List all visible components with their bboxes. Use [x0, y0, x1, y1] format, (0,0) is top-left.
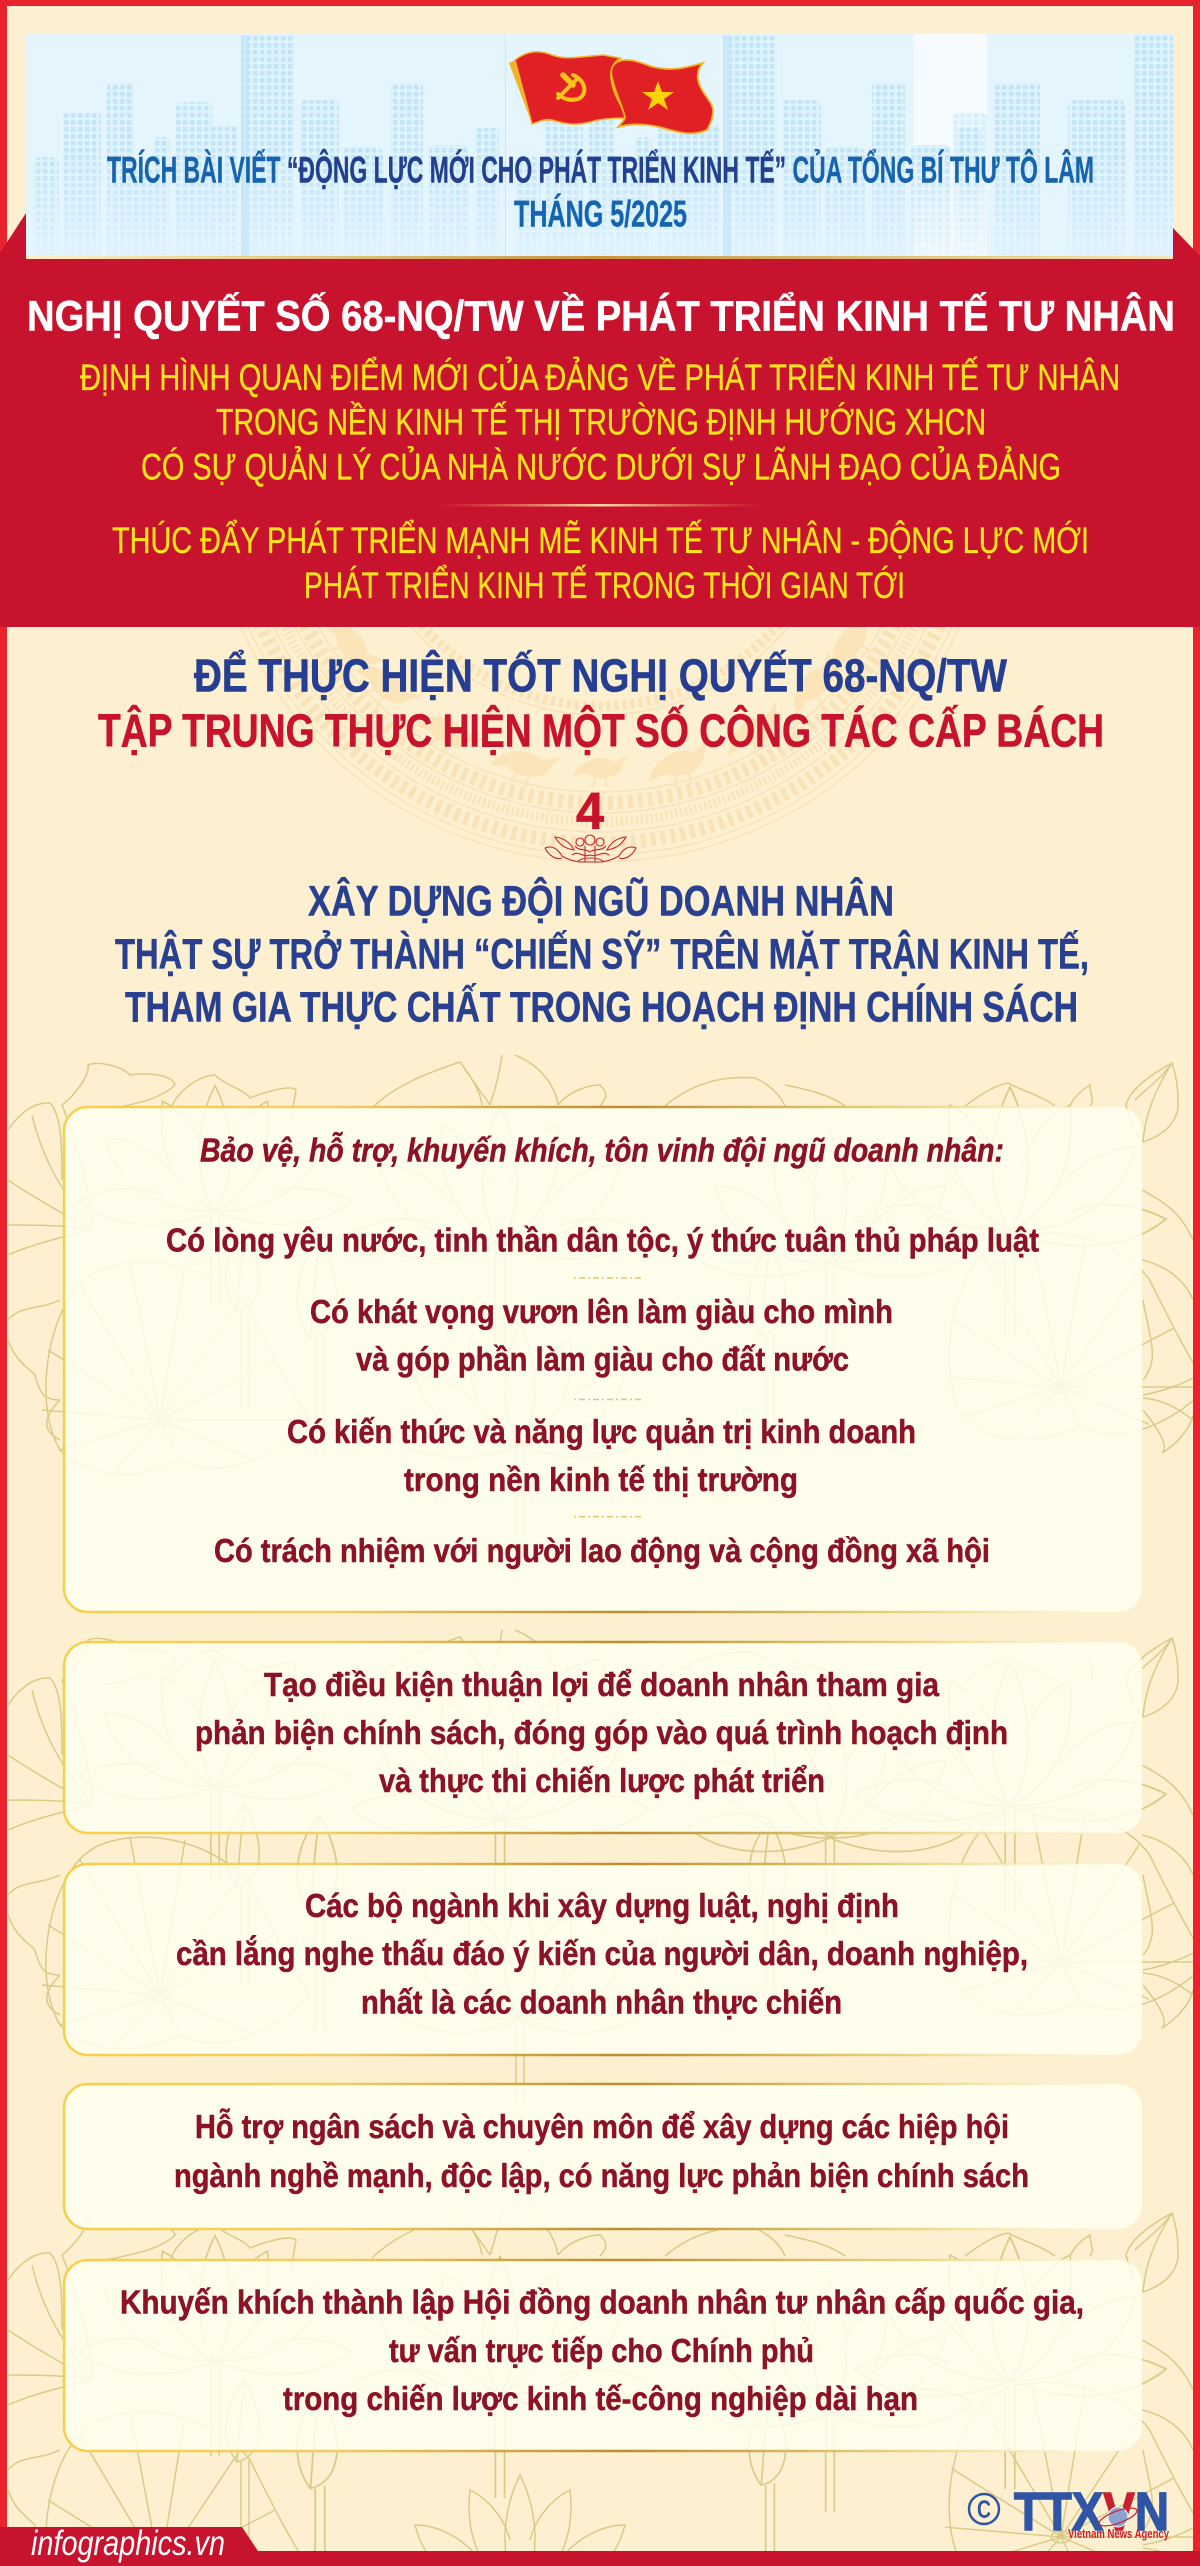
panel: card one	[64, 1107, 1142, 1612]
card one item three: Có kiến thức và năng lực quản trị kinh doanh	[287, 1413, 916, 1450]
card one item one: Có lòng yêu nước, tinh thần dân tộc, ý thức tuân thủ pháp luật	[166, 1222, 1039, 1259]
bronze drum watermark	[208, 78, 992, 862]
card one item two: Có khát vọng vươn lên làm giàu cho mình	[310, 1293, 893, 1330]
card two text: Tạo điều kiện thuận lợi để doanh nhân tham gia	[264, 1666, 940, 1703]
card five text	[120, 2284, 1084, 2417]
banner heading	[107, 148, 1094, 234]
card one heading: Bảo vệ, hỗ trợ, khuyến khích, tôn vinh đội ngũ doanh nhân:	[200, 1132, 1004, 1169]
card one item four: Có trách nhiệm với người lao động và cộng đồng xã hội	[214, 1532, 990, 1569]
card two text: phản biện chính sách, đóng góp vào quá trình hoạch định	[195, 1714, 1008, 1751]
card five text: trong chiến lược kinh tế-công nghiệp dài hạn	[283, 2380, 918, 2417]
section heading	[98, 650, 1104, 757]
card one item three	[287, 1413, 916, 1498]
card two text: và thực thi chiến lược phát triển	[379, 1762, 825, 1799]
panel statement two	[112, 519, 1089, 606]
footer bar	[0, 2524, 1200, 2566]
panel: card three	[64, 1864, 1142, 2055]
card two text	[195, 1666, 1008, 1799]
section subtitle	[115, 876, 1089, 1032]
card one item three: trong nền kinh tế thị trường	[404, 1461, 798, 1498]
decorative lotus line art	[8, 1055, 1200, 2566]
panel statement one: TRONG NỀN KINH TẾ THỊ TRƯỜNG ĐỊNH HƯỚNG XHCN	[216, 402, 986, 442]
icon: party and national flags	[509, 52, 713, 133]
card one item two: và góp phần làm giàu cho đất nước	[356, 1341, 849, 1378]
icon: red ornament	[545, 835, 636, 862]
number four: 4	[576, 783, 604, 841]
copyright mark: C	[977, 2496, 991, 2524]
footer site name: infographics.vn	[31, 2524, 225, 2563]
card four text	[174, 2108, 1029, 2194]
section subtitle: XÂY DỰNG ĐỘI NGŨ DOANH NHÂN	[308, 876, 894, 925]
panel: card five	[64, 2260, 1142, 2451]
banner: city skyline	[26, 34, 1173, 256]
panel: red resolution panel	[0, 213, 1200, 627]
panel: card two	[64, 1642, 1142, 1833]
copyright mark	[969, 2494, 999, 2524]
card three text: cần lắng nghe thấu đáo ý kiến của người dân, doanh nghiệp,	[176, 1935, 1028, 1972]
agency initials: TTXVN	[1014, 2482, 1169, 2542]
card four text: Hỗ trợ ngân sách và chuyên môn để xây dựng các hiệp hội	[195, 2108, 1009, 2145]
panel statement one	[80, 356, 1120, 488]
icon: globe	[1097, 2505, 1139, 2529]
icon: gold star	[642, 81, 674, 110]
card five text: Khuyến khích thành lập Hội đồng doanh nhân tư nhân cấp quốc gia,	[120, 2284, 1084, 2320]
panel: card four	[64, 2084, 1142, 2229]
banner date: THÁNG 5/2025	[514, 194, 687, 234]
card one item two	[310, 1293, 893, 1378]
card three text: Các bộ ngành khi xây dựng luật, nghị định	[305, 1887, 899, 1924]
card five text: tư vấn trực tiếp cho Chính phủ	[389, 2332, 814, 2369]
section heading: ĐỂ THỰC HIỆN TỐT NGHỊ QUYẾT 68-NQ/TW	[194, 650, 1007, 702]
icon: hammer and sickle	[558, 75, 584, 100]
logo: TTXVN	[969, 2482, 1170, 2542]
card three text: nhất là các doanh nhân thực chiến	[361, 1984, 842, 2020]
card three text	[176, 1887, 1028, 2020]
panel statement two: PHÁT TRIỂN KINH TẾ TRONG THỜI GIAN TỚI	[304, 564, 905, 606]
card four text: ngành nghề mạnh, độc lập, có năng lực phản biện chính sách	[174, 2157, 1029, 2194]
